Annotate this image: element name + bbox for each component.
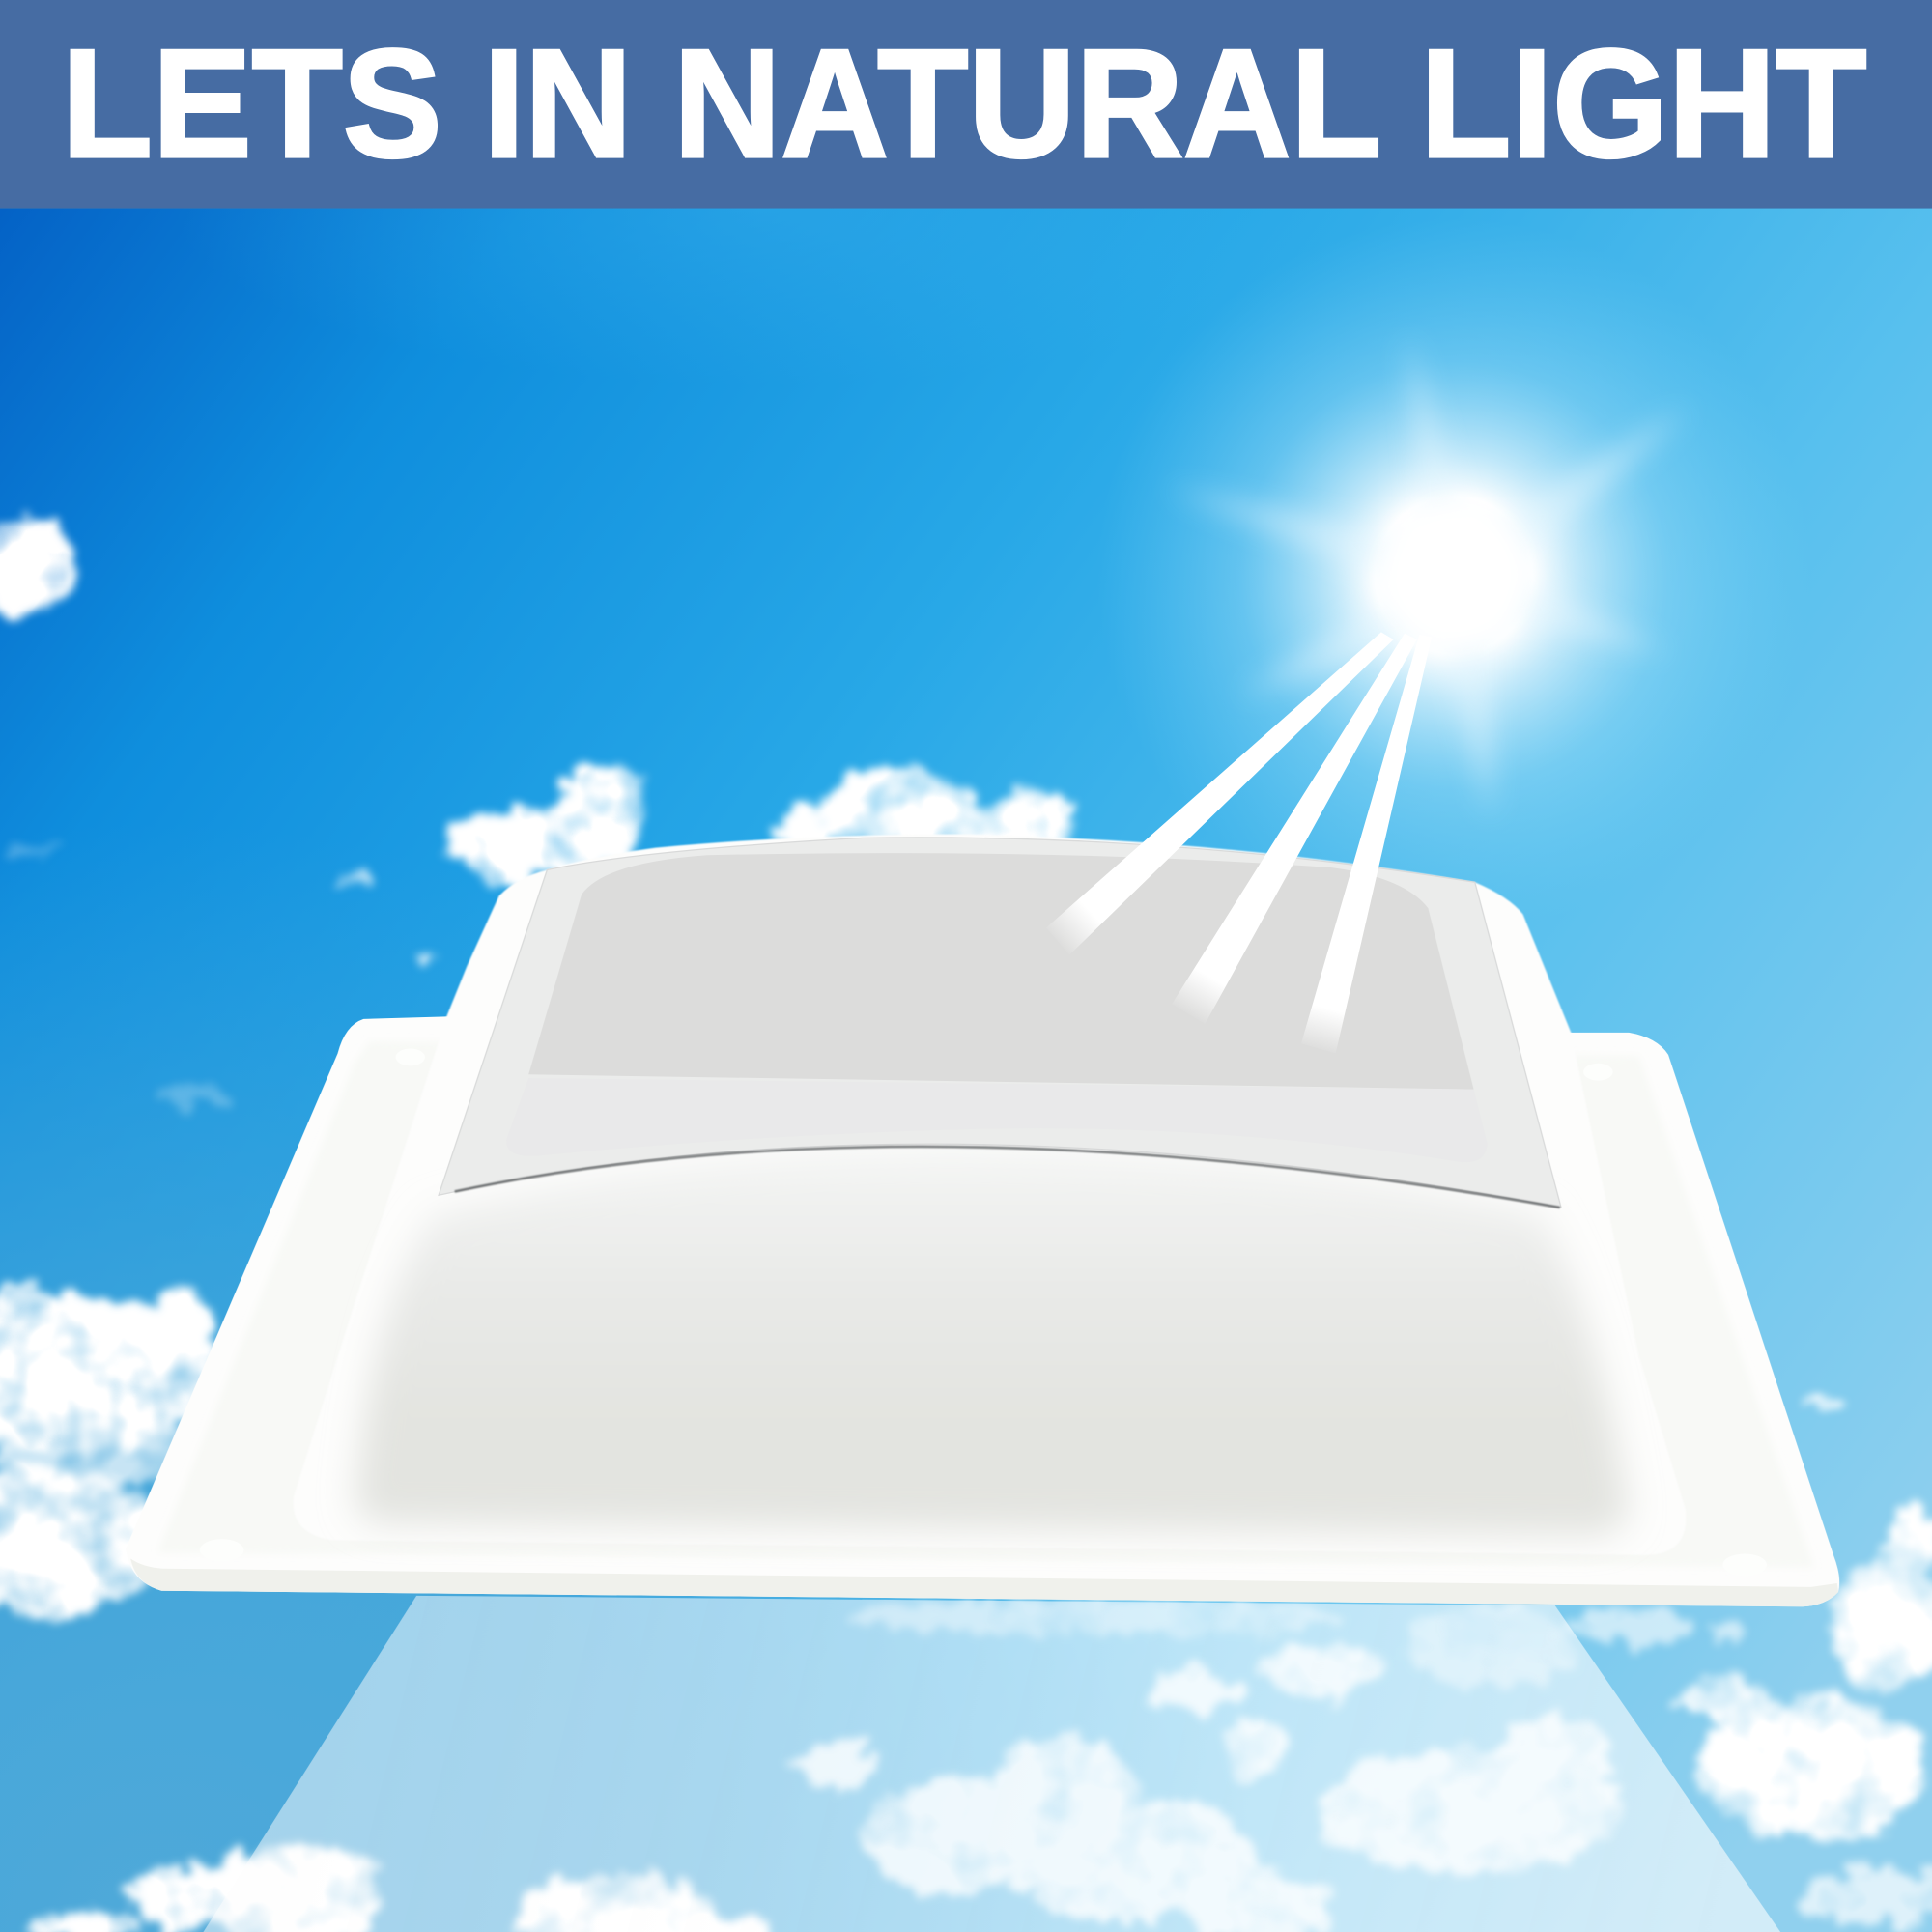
dark gasket curve (455, 1147, 1560, 1208)
flange front edge (130, 1559, 1838, 1606)
title banner (0, 0, 1932, 209)
title: LETS IN NATURAL LIGHT (62, 17, 1866, 189)
light beam through skylight (203, 1596, 1780, 1932)
clouds in upper sky (0, 518, 1847, 1408)
sun with glow (1096, 218, 1811, 933)
clouds at lower right (1571, 1503, 1932, 1927)
flange base (126, 1016, 1839, 1606)
skylight dome product (126, 835, 1839, 1606)
flange inner tray (157, 1041, 1814, 1567)
clouds at bottom left (28, 1843, 777, 1932)
clouds at left edge (0, 1283, 215, 1614)
clouds seen in light beam (796, 1600, 1620, 1932)
dome shaded front (355, 1146, 1629, 1535)
screw bumps (200, 1048, 1767, 1576)
light lower band (506, 1078, 1488, 1162)
sun rays (1046, 632, 1432, 1054)
clear film window (439, 838, 1561, 1208)
dome body (293, 835, 1686, 1555)
sun star spikes (1164, 332, 1690, 819)
grey window panel (528, 853, 1474, 1090)
